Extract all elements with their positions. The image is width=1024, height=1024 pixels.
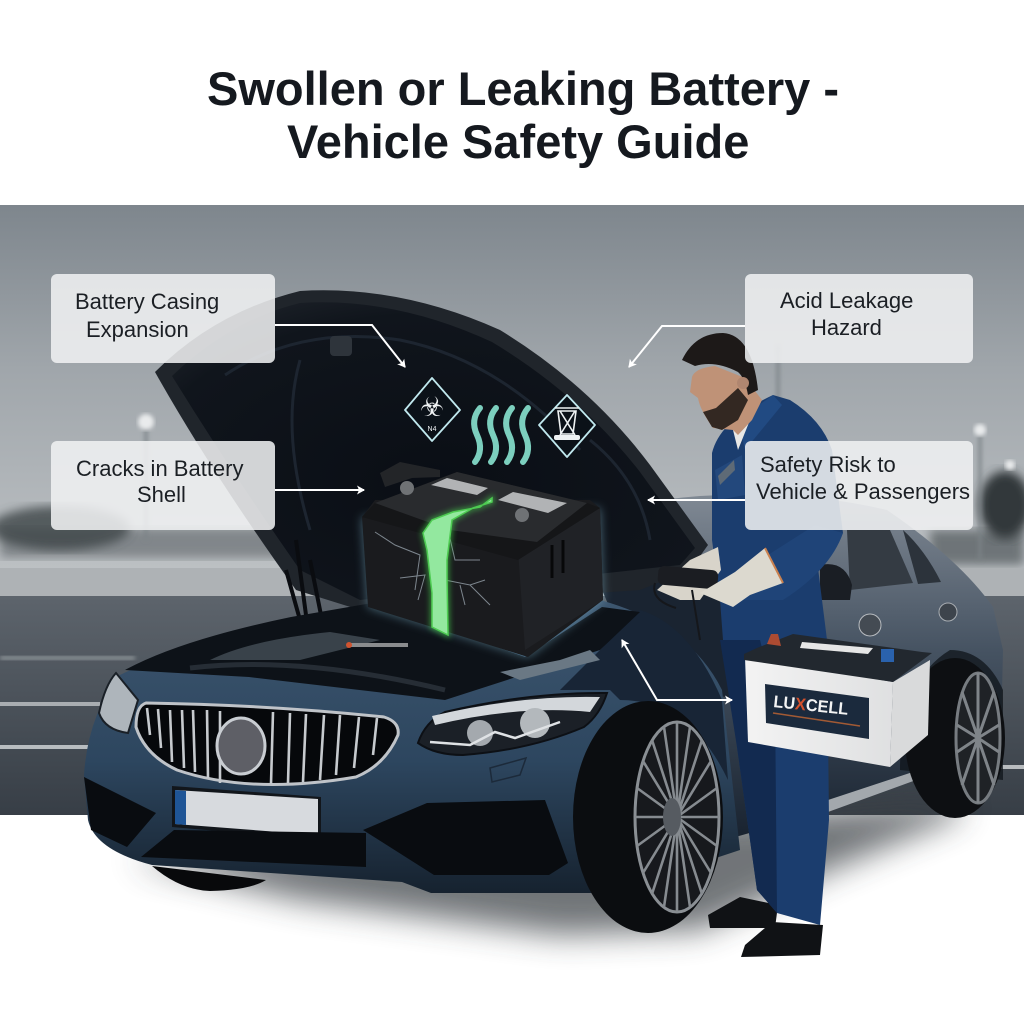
car grille (136, 703, 398, 785)
callout: acid leakage hazard: Acid Leakage (780, 288, 913, 313)
bumper intakes (84, 777, 568, 875)
engine bay (125, 603, 640, 700)
mechanic (654, 333, 843, 957)
licence plate (172, 786, 321, 840)
arrow: acid leakage (629, 326, 745, 367)
shoes (708, 897, 823, 957)
gloves and meter (654, 547, 783, 640)
overalls (712, 395, 843, 925)
callout: safety risk: Safety Risk to (760, 452, 896, 477)
right headlight (418, 693, 607, 755)
arrow: safety risk (648, 499, 745, 501)
arrow: replacement battery (622, 640, 732, 700)
ground shadow (130, 800, 960, 935)
LUXCELL label (765, 684, 869, 739)
callout: battery casing expansion (51, 274, 275, 363)
callout: cracks in battery shell: Cracks in Battery (76, 456, 244, 481)
icon: biohazard: ☣ (420, 392, 444, 423)
LUXCELL label: LUXCELL (773, 692, 849, 719)
callout: safety risk: Vehicle & Passengers (756, 479, 970, 504)
held replacement battery (744, 634, 932, 767)
open car hood (155, 290, 708, 620)
arrow: cracks (275, 489, 364, 491)
icon: heat waves (474, 408, 528, 462)
icon: biohazard: N4 (428, 426, 437, 433)
arrow: casing expansion (275, 325, 405, 367)
callout: cracks in battery shell (51, 441, 275, 530)
title: Swollen or Leaking Battery - (207, 62, 839, 115)
callout: battery casing expansion: Expansion (86, 317, 189, 342)
callout: cracks in battery shell: Shell (137, 482, 186, 507)
callout: acid leakage hazard (745, 274, 973, 363)
callout: battery casing expansion: Battery Casing (75, 289, 219, 314)
rear wheel (905, 658, 1005, 818)
front wheel (573, 701, 723, 933)
head (682, 333, 762, 435)
green crack (423, 498, 492, 635)
swollen battery with crack (362, 462, 603, 657)
filler cap (490, 758, 526, 782)
title: Vehicle Safety Guide (287, 115, 749, 168)
car side and cabin (600, 494, 1003, 840)
callout: safety risk (745, 441, 973, 530)
background scene (0, 205, 1024, 1024)
callout: acid leakage hazard: Hazard (811, 315, 882, 340)
icon: biohazard (405, 378, 460, 441)
icon: battery disposal (539, 395, 595, 457)
car front body (84, 600, 740, 893)
left headlight (99, 673, 138, 733)
title (207, 62, 839, 168)
